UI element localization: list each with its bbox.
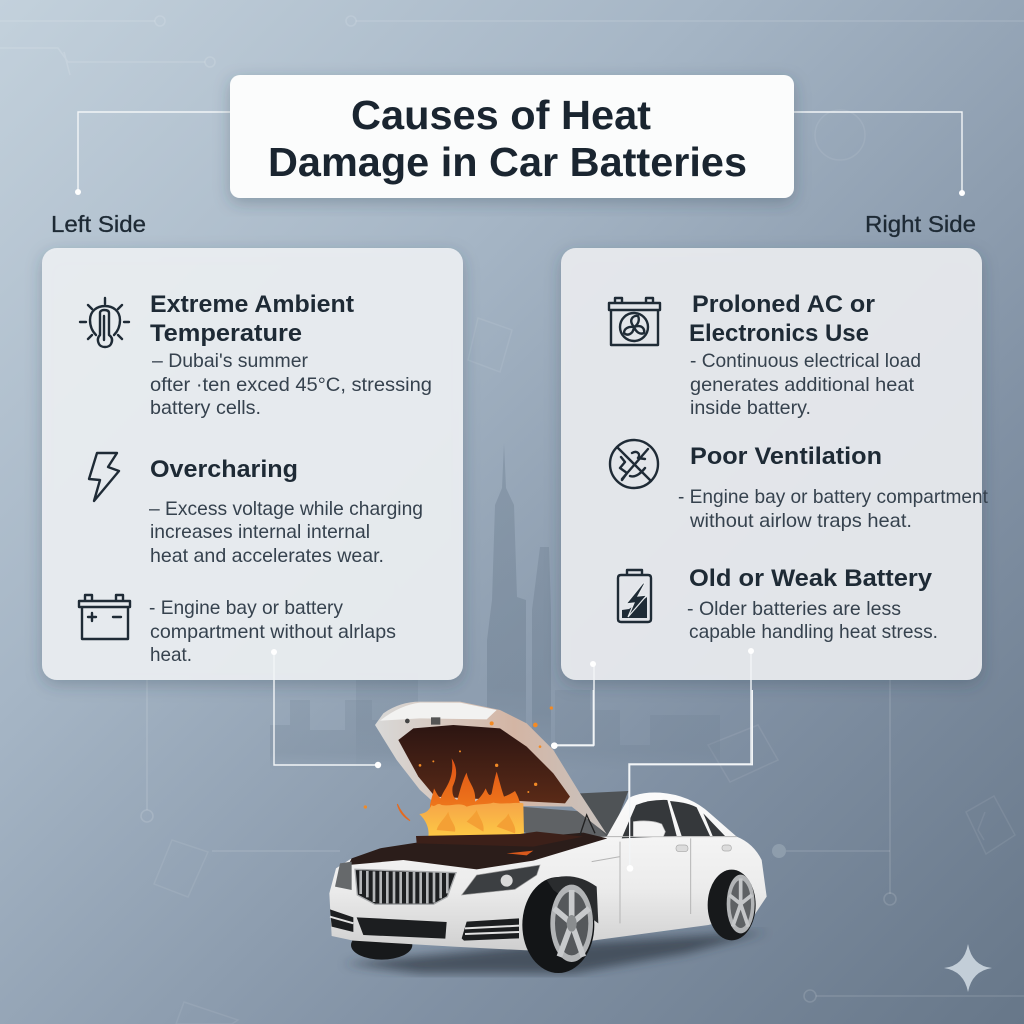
front-left wheel: [351, 930, 412, 960]
background node: [772, 844, 786, 858]
hood bay dark: [348, 833, 607, 869]
car body: [329, 793, 767, 951]
label: right side: Right Side: [865, 211, 976, 237]
text: overcharging description: increases internal internal: [150, 521, 370, 543]
text: ambient temperature description: – Dubai's summer: [152, 350, 308, 372]
icon: battery: [79, 595, 130, 639]
engine bay machinery: [520, 807, 607, 837]
background faint icons: [154, 110, 1015, 1024]
text: ventilation description: - Engine bay or battery compartment: [678, 486, 989, 508]
headlights: [335, 862, 540, 895]
icon: battery with fan: [609, 298, 660, 345]
background skyline: [270, 443, 720, 770]
title box: [230, 75, 794, 198]
icon: lightning bolt: [89, 453, 119, 501]
car with burning engine: [329, 690, 767, 973]
text: ambient temperature description: battery cells.: [150, 397, 261, 419]
label: left side: Left Side: [51, 211, 146, 237]
door lines and handles: [592, 837, 737, 923]
text: overcharging description: – Excess voltage while charging: [149, 498, 423, 520]
icon: thermometer sun: [80, 298, 129, 347]
connector over car: [551, 690, 752, 872]
heading: overcharing: Overcharing: [150, 456, 298, 483]
text: engine bay description: compartment without alrlaps: [150, 621, 396, 643]
text: electrical load description: - Continuous electrical load: [690, 350, 921, 372]
battery plate: [416, 832, 583, 847]
glowing embers under flames: [507, 851, 533, 855]
text: ambient temperature description: ofter ·ten exced 45°C, stressing: [150, 374, 432, 396]
text: engine bay description: - Engine bay or battery: [149, 597, 343, 619]
heading: prolonged ac: Proloned AC or: [692, 291, 875, 318]
text: older batteries description: capable handling heat stress.: [689, 621, 938, 643]
flames: [419, 758, 524, 837]
lower intakes: [330, 909, 519, 941]
front grille: [355, 869, 456, 904]
heading: old or weak battery: Old or Weak Battery: [689, 565, 933, 592]
text: electrical load description: inside battery.: [690, 397, 811, 419]
panel: left side: [42, 248, 463, 680]
heading: extreme ambient temperature: Extreme Ambient: [150, 291, 354, 318]
sparks: [364, 706, 553, 821]
text: engine bay description: heat.: [150, 644, 192, 666]
hood underside: [398, 725, 570, 803]
text: ventilation description: without airlow traps heat.: [689, 510, 912, 532]
panel: right side: [561, 248, 989, 680]
strut: [580, 815, 595, 835]
text: older batteries description: - Older batteries are less: [687, 598, 901, 620]
text: overcharging description: heat and accelerates wear.: [150, 545, 384, 567]
text: electrical load description: generates additional heat: [690, 374, 915, 396]
side mirror: [633, 821, 665, 837]
rear wheel: [708, 870, 756, 940]
open hood: [375, 702, 607, 834]
side windows: [622, 800, 725, 838]
windshield behind hood: [580, 791, 628, 838]
sparkle icon: [944, 944, 992, 992]
title: Damage in Car Batteries: [268, 139, 747, 185]
icon: no ventilation: [610, 440, 658, 488]
front wheel: [522, 876, 598, 973]
heading: extreme ambient temperature: Temperature: [150, 320, 302, 347]
car shadow: [343, 932, 767, 973]
heading: prolonged ac: Electronics Use: [689, 320, 869, 347]
title: Causes of Heat: [351, 92, 651, 138]
heading: poor ventilation: Poor Ventilation: [690, 443, 882, 470]
icon: weak battery: [618, 570, 651, 622]
connector lines: [75, 112, 965, 868]
